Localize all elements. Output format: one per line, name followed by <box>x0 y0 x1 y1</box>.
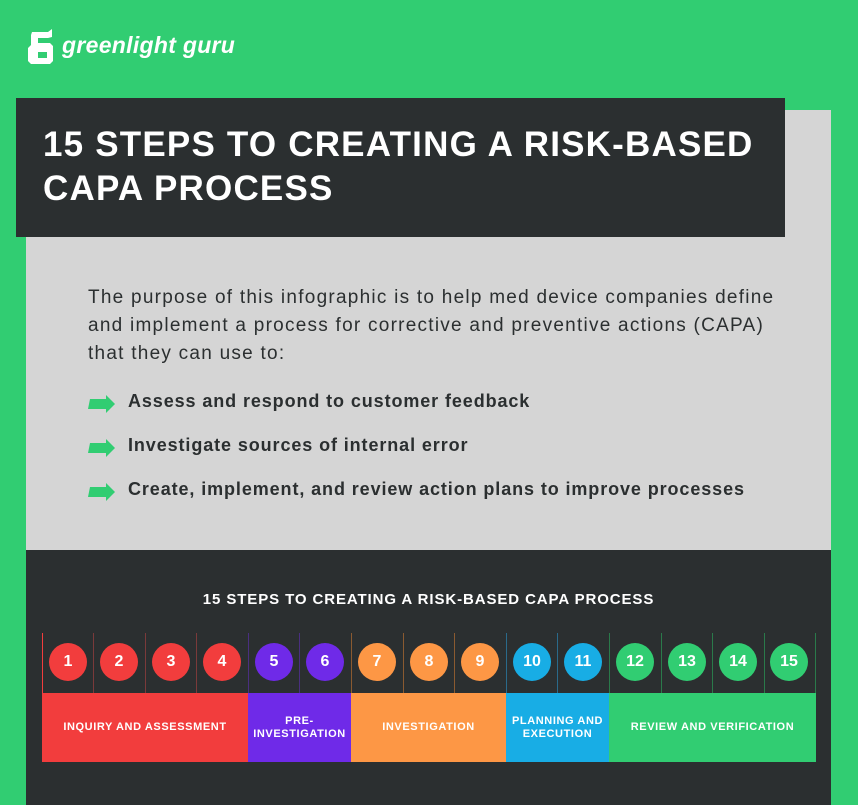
phase: planning and execution: PLANNING AND <box>512 714 603 726</box>
phase: inquiry and assessment: INQUIRY AND ASSESSMENT <box>63 721 227 733</box>
step circles: 8 <box>425 653 433 670</box>
step circles: 1 <box>64 653 72 670</box>
title box: CAPA PROCESS <box>43 169 334 208</box>
title box: 15 STEPS TO CREATING A RISK-BASED <box>43 125 754 164</box>
step circles: 14 <box>729 653 747 670</box>
phase: inquiry and assessment <box>42 693 248 762</box>
gray intro panel <box>26 110 831 550</box>
step circles: 6 <box>321 653 329 670</box>
phase: review and verification <box>609 693 816 762</box>
phase: review and verification: REVIEW AND VERIFICATION <box>631 721 794 733</box>
steps heading: 15 STEPS TO CREATING A RISK-BASED CAPA PROCESS <box>203 591 654 608</box>
step circles: 4 <box>218 653 226 670</box>
bullet 1 <box>88 391 530 413</box>
intro text: and implement a process for corrective and preventive actions (CAPA) <box>88 315 764 336</box>
text: Investigate sources of internal error <box>128 435 468 455</box>
phase: planning and execution: EXECUTION <box>523 728 592 740</box>
phase: investigation <box>351 693 506 762</box>
intro text: The purpose of this infographic is to help med device companies define <box>88 287 774 308</box>
phase: pre-investigation: INVESTIGATION <box>253 728 346 740</box>
bullet 2 <box>88 435 468 457</box>
phase: pre-investigation: PRE- <box>285 714 314 726</box>
step circles: 13 <box>678 653 696 670</box>
text: Assess and respond to customer feedback <box>128 391 530 411</box>
step circles: 12 <box>626 653 644 670</box>
step circles: 11 <box>575 653 591 670</box>
logo <box>28 29 235 64</box>
logo: greenlight guru <box>62 32 235 58</box>
text: Create, implement, and review action plans to improve processes <box>128 479 745 499</box>
phase: pre-investigation <box>248 693 351 762</box>
step circles: 3 <box>167 653 175 670</box>
step circles: 5 <box>270 653 278 670</box>
intro text: that they can use to: <box>88 343 285 364</box>
bullet 3 <box>88 479 745 501</box>
phase: investigation: INVESTIGATION <box>382 721 475 733</box>
intro text <box>88 287 774 364</box>
step circles: 7 <box>373 653 381 670</box>
step circles: 9 <box>476 653 484 670</box>
step circles: 2 <box>115 653 123 670</box>
phase: planning and execution <box>506 693 609 762</box>
title box <box>16 98 785 237</box>
step circles: 15 <box>780 653 798 670</box>
dark steps panel <box>26 550 831 805</box>
step circles: 10 <box>523 653 541 670</box>
step circles <box>49 643 808 681</box>
